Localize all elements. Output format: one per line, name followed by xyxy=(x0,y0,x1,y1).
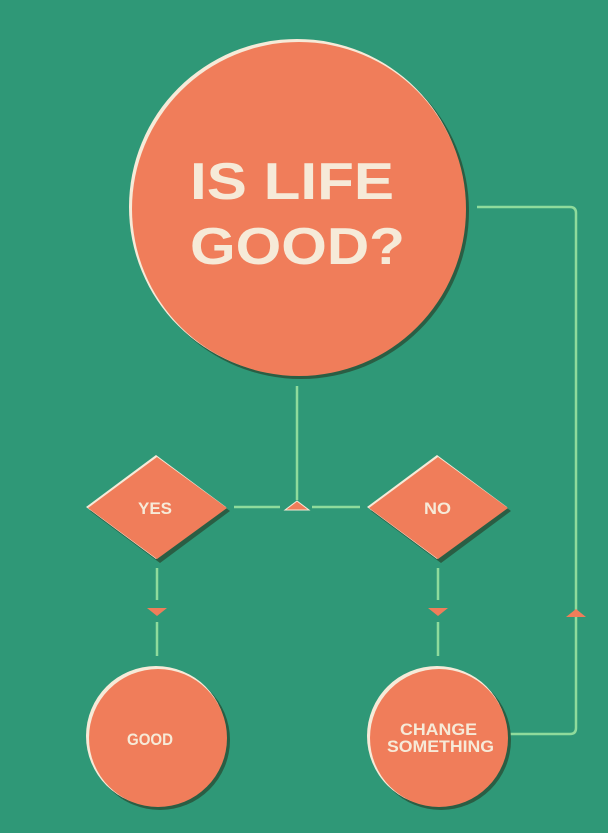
circle: change something: SOMETHING xyxy=(387,737,494,756)
main circle: is life good xyxy=(129,39,469,379)
circle: change something: CHANGE xyxy=(400,720,477,739)
circle: good: GOOD xyxy=(127,730,173,749)
connector lines xyxy=(157,207,576,734)
arrow: yes down xyxy=(147,608,167,616)
main circle: is life good: IS LIFE xyxy=(190,153,394,211)
arrow: loop up xyxy=(566,609,586,617)
arrow: no down xyxy=(428,608,448,616)
circle: change something xyxy=(367,666,511,810)
diamond: yes: YES xyxy=(138,499,172,518)
diamond: yes xyxy=(86,455,230,563)
circle: good xyxy=(86,666,230,810)
main circle: is life good: GOOD? xyxy=(190,218,405,276)
diamond: no: NO xyxy=(424,499,451,518)
arrow: center up xyxy=(285,501,309,510)
diamond: no xyxy=(367,455,511,563)
